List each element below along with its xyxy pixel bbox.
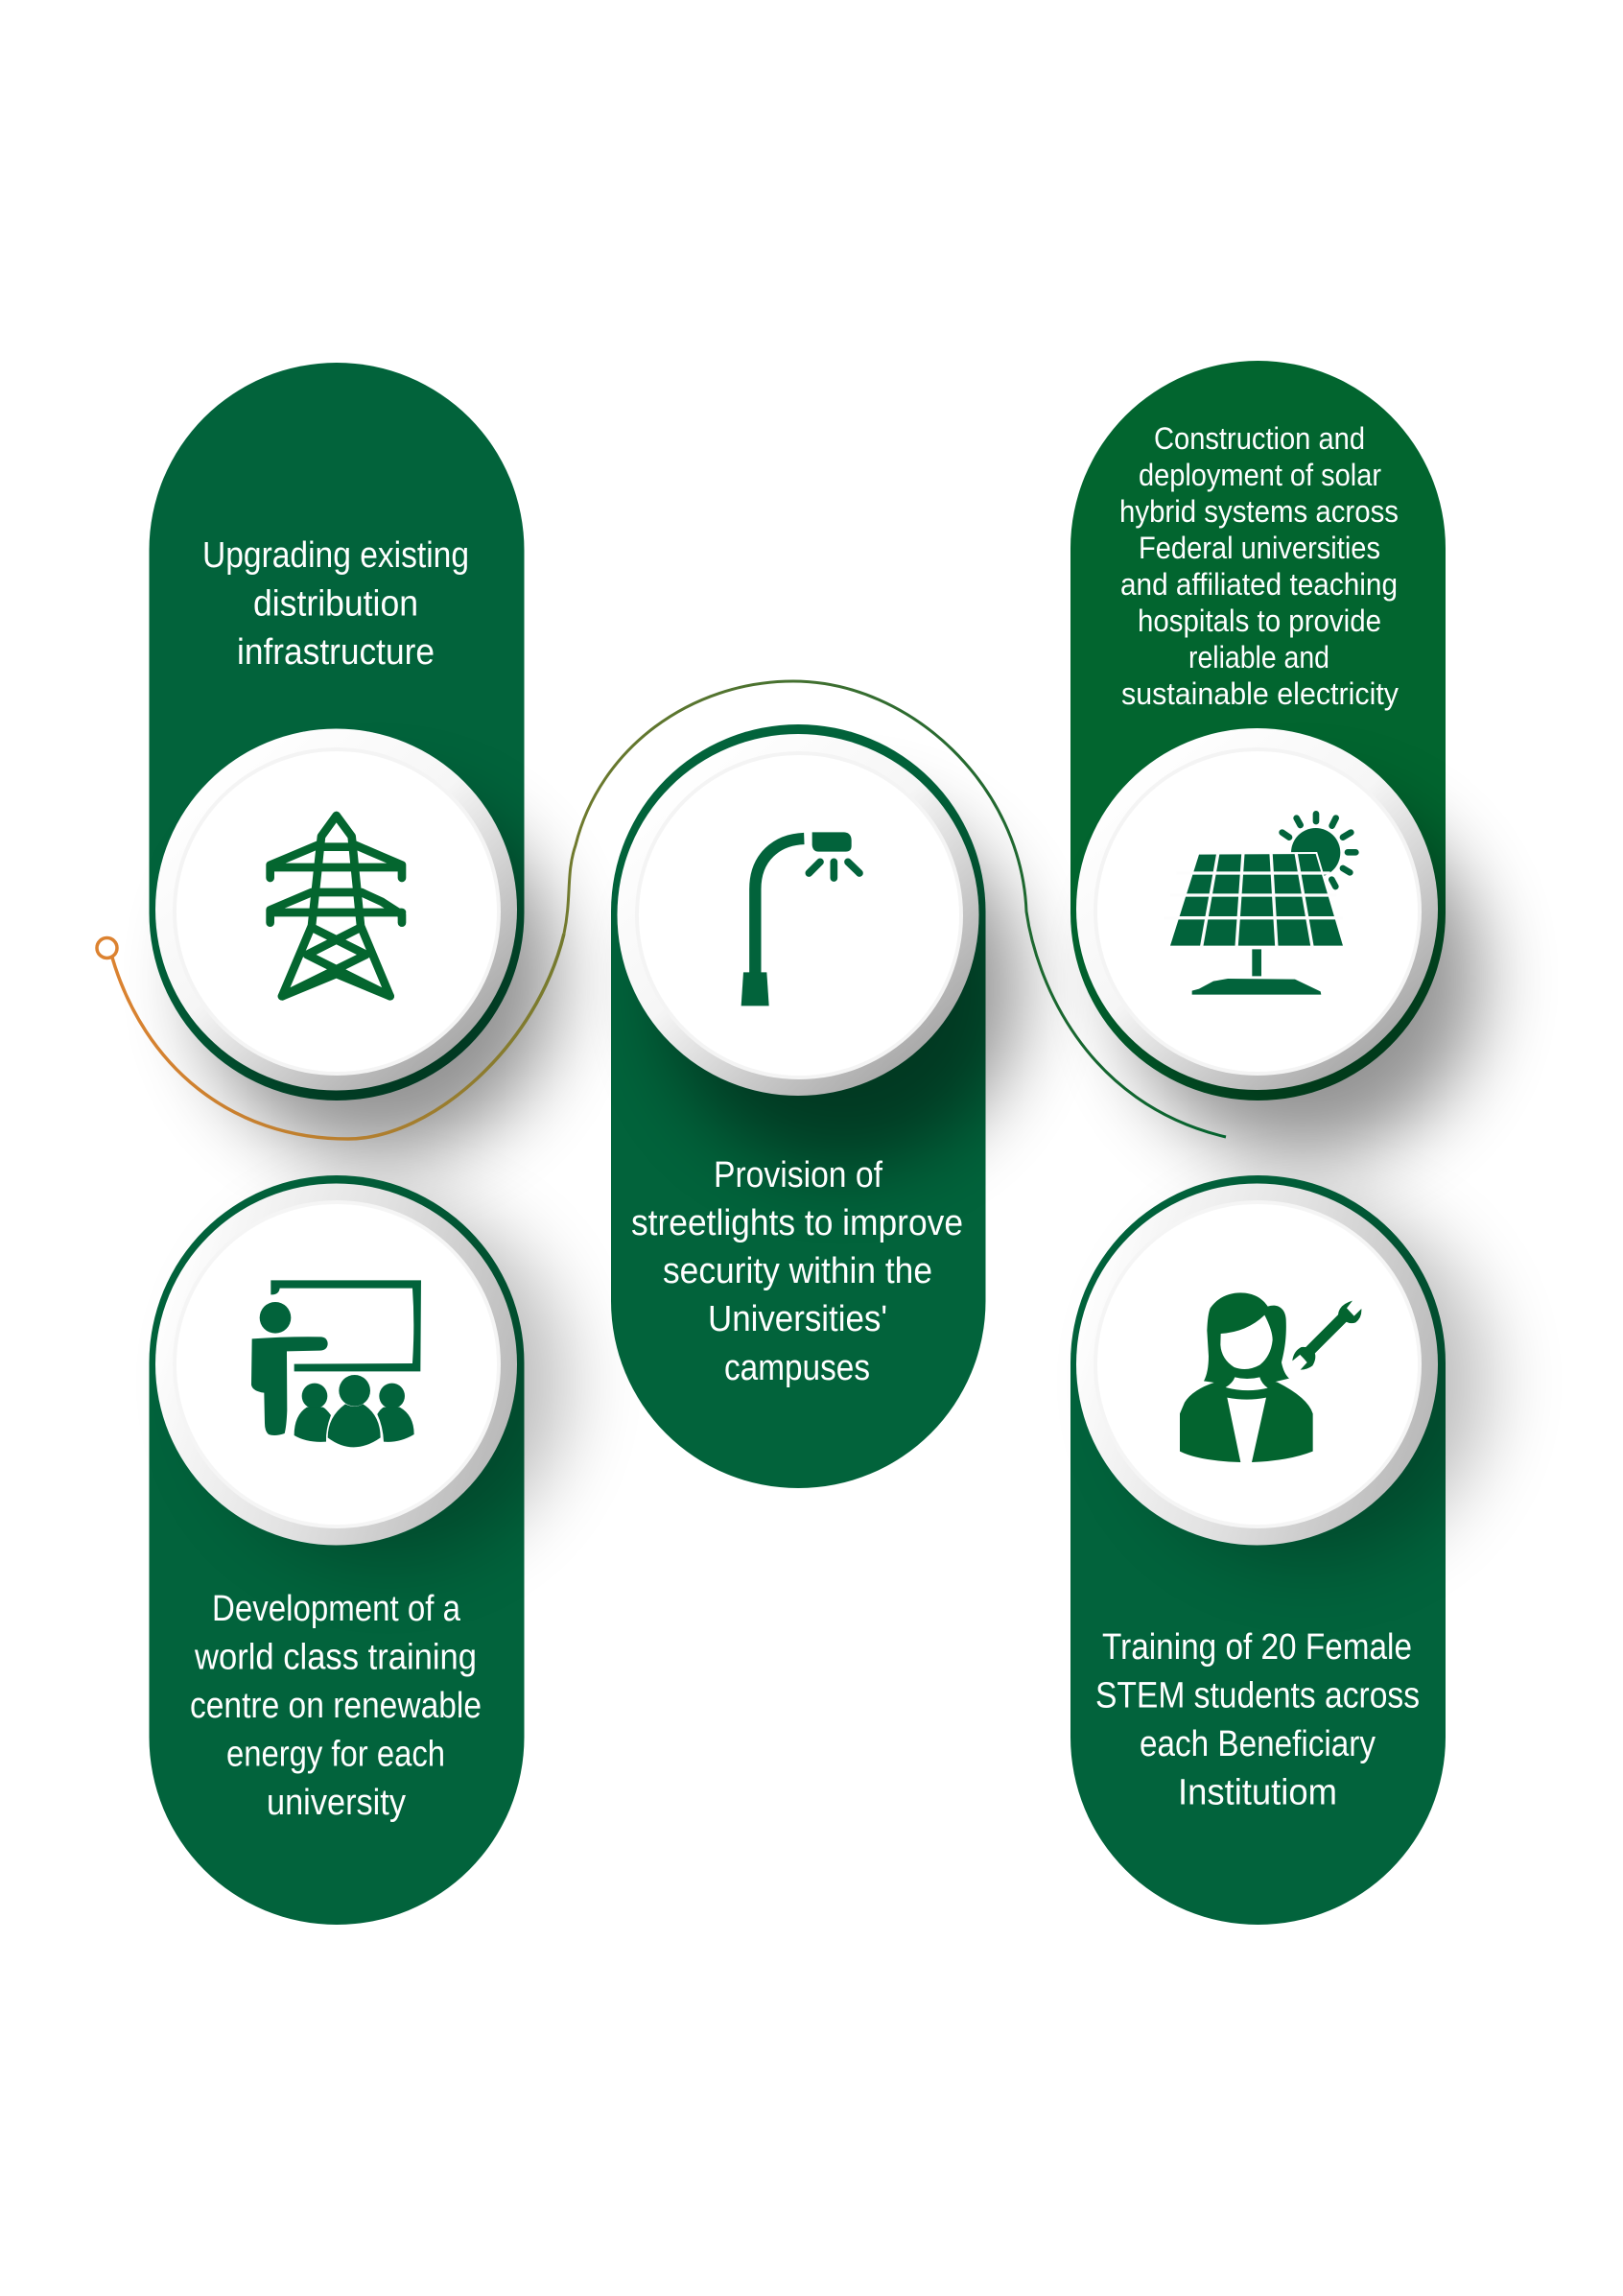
label text: Training of 20 Female [1102,1627,1412,1668]
disc [1076,728,1438,1090]
label text: Development of a [212,1589,461,1629]
label text [190,1589,482,1823]
disc [1076,1184,1438,1545]
icon: transmission tower [270,816,402,996]
panel: streetlights [611,724,1021,1488]
disc [155,729,517,1090]
label text: campuses [724,1348,870,1388]
label text [631,1155,963,1388]
icon: street lamp [741,832,859,1006]
label text: hospitals to provide [1138,604,1381,638]
disc shadow [1131,1203,1488,1560]
label text: each Beneficiary [1140,1724,1376,1764]
label text: Universities' [708,1299,887,1339]
label text: Federal universities [1139,531,1380,565]
label text: security within the [663,1251,932,1291]
disc shadow [1124,800,1481,1157]
label text: sustainable electricity [1121,676,1400,711]
label text: Institutiom [1178,1773,1337,1813]
panel: world class training centre [150,1175,567,1925]
pill background [150,1175,524,1925]
icon: teacher and students [251,1280,421,1447]
disc [155,1184,517,1545]
label text: streetlights to improve [631,1203,963,1243]
label text: and affiliated teaching [1120,567,1398,602]
label text: hybrid systems across [1119,494,1399,529]
icon: woman with wrench [1180,1292,1361,1462]
label text: Provision of [714,1155,882,1195]
label text: deployment of solar [1139,458,1381,492]
panel: solar hybrid systems [1070,361,1481,1157]
disc shadow [210,1203,567,1560]
disc shadow [664,810,1021,1167]
label text: infrastructure [237,632,435,673]
pill background [1070,361,1446,1101]
panel: female STEM training [1070,1175,1488,1925]
disc shadow [200,800,557,1157]
pill background [1070,1175,1446,1925]
icon: solar panel and sun [1164,814,1355,995]
connector curve [97,681,1226,1139]
label text: centre on renewable [190,1686,482,1726]
label text: university [267,1783,406,1823]
disc [618,734,978,1096]
label text: Construction and [1154,421,1365,456]
label text: STEM students across [1095,1675,1420,1716]
label text: distribution [253,583,418,624]
panel: upgrading distribution infrastructure [150,363,557,1157]
pill background [150,363,524,1101]
label text [1119,421,1400,711]
label text: reliable and [1188,640,1329,675]
label text: energy for each [226,1735,445,1775]
pill background [611,724,986,1488]
label text [202,535,469,673]
label text: world class training [194,1637,477,1677]
label text [1095,1627,1420,1813]
label text: Upgrading existing [202,535,469,576]
